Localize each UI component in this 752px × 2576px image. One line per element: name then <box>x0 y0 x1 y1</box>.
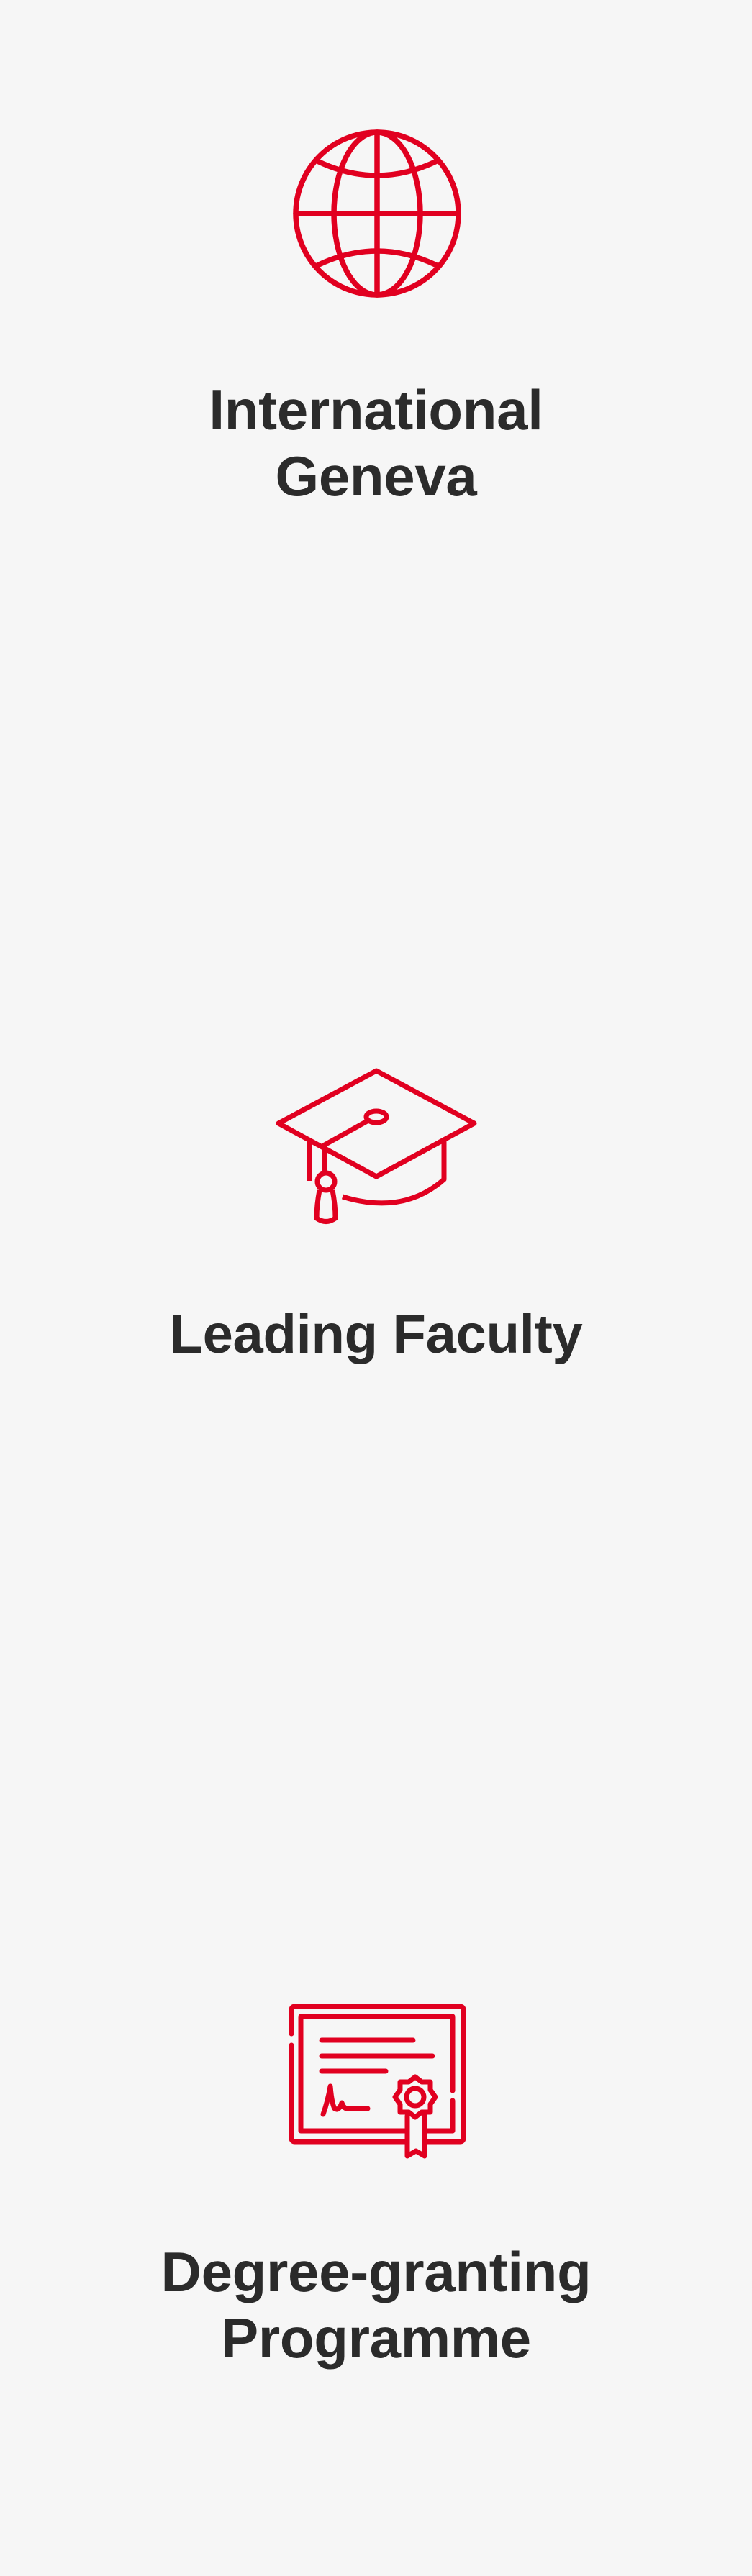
icon: globe <box>293 129 461 298</box>
heading: Degree-granting Programme: Degree-granting <box>161 2240 591 2303</box>
heading: International Geneva: International <box>209 378 543 442</box>
heading: Degree-granting Programme <box>161 2240 591 2370</box>
heading: International Geneva <box>209 378 543 508</box>
heading: Leading Faculty: Leading Faculty <box>169 1304 583 1365</box>
icon: graduation cap <box>276 1069 476 1224</box>
icon: certificate <box>289 2004 466 2159</box>
heading: International Geneva: Geneva <box>275 444 477 508</box>
heading: Degree-granting Programme: Programme <box>221 2306 531 2370</box>
